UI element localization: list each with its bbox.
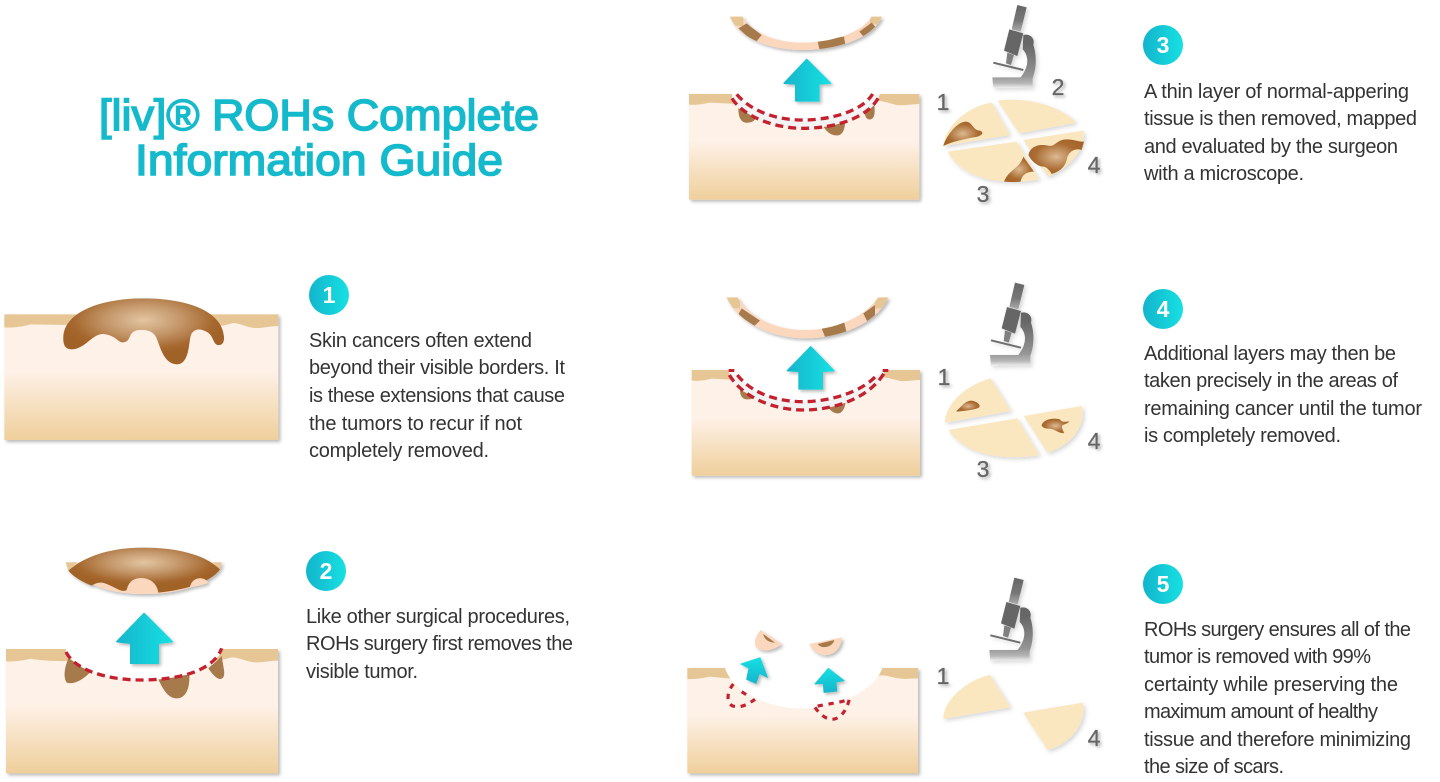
step 3 pie labels xyxy=(937,74,1101,207)
up arrow xyxy=(784,59,831,101)
excised bowl xyxy=(725,665,882,708)
step 5 text: maximum amount of healthy xyxy=(1144,701,1378,723)
step 1 text: beyond their visible borders. It xyxy=(309,357,565,379)
skin surface band xyxy=(692,370,920,381)
panel: step 3 illustration xyxy=(689,5,1084,200)
microscope xyxy=(989,578,1033,661)
skin block xyxy=(689,94,919,200)
step 3 text xyxy=(1143,81,1417,185)
step 4 pie labels: 1 xyxy=(938,364,950,390)
arrow: right pocket xyxy=(815,668,844,692)
step 3 text: with a microscope. xyxy=(1143,163,1304,185)
title xyxy=(99,91,539,185)
skin block xyxy=(4,314,278,440)
step 2 text xyxy=(306,606,573,683)
step 1 text xyxy=(309,330,565,462)
step 3 badge: 3 xyxy=(1157,32,1169,58)
step 1 text: Skin cancers often extend xyxy=(309,330,532,352)
panel: step 5 illustration xyxy=(687,578,1084,773)
removed tissue layer xyxy=(723,293,892,339)
step 5 badge xyxy=(1143,564,1183,604)
step 3 pie labels: 1 xyxy=(937,89,949,115)
step 1 badge xyxy=(309,275,349,315)
up arrow xyxy=(117,613,172,663)
step 2 badge xyxy=(306,551,346,591)
step 2 text: visible tumor. xyxy=(306,661,418,683)
step 4 text: remaining cancer until the tumor xyxy=(1144,398,1422,420)
step 5 pie labels: 1 xyxy=(937,663,949,689)
step 3 text: A thin layer of normal-appering xyxy=(1144,81,1409,103)
step 3 pie labels: 2 xyxy=(1052,74,1064,100)
step 2 text: Like other surgical procedures, xyxy=(306,606,570,628)
excised bowl xyxy=(66,647,222,680)
panel: step 1 illustration xyxy=(4,298,278,440)
step 5 text: tumor is removed with 99% xyxy=(1144,646,1371,668)
removed pocket: right xyxy=(809,637,842,655)
step 3 pie labels: 4 xyxy=(1088,152,1101,178)
pie sections xyxy=(943,100,1084,182)
step 5 text: tissue and therefore minimizing xyxy=(1144,729,1411,751)
title: Information Guide xyxy=(135,136,503,185)
skin block xyxy=(692,370,920,476)
step 4 text: is completely removed. xyxy=(1144,425,1341,447)
microscope xyxy=(990,283,1033,366)
step 5 pie labels xyxy=(937,663,1101,751)
step 5 badge: 5 xyxy=(1157,571,1170,597)
skin surface band xyxy=(687,668,918,679)
step 4 pie labels: 3 xyxy=(977,456,989,482)
excised bowl xyxy=(729,367,884,410)
panel: step 2 illustration xyxy=(6,548,278,773)
microscope xyxy=(992,5,1036,88)
step 5 text xyxy=(1144,619,1411,778)
step 1 text: the tumors to recur if not xyxy=(309,413,522,435)
skin surface band xyxy=(4,314,278,328)
step 3 text: tissue is then removed, mapped xyxy=(1144,108,1417,130)
excision lines xyxy=(737,374,877,402)
tumor xyxy=(63,298,224,364)
up arrow xyxy=(787,347,834,389)
step 1 badge: 1 xyxy=(323,282,336,308)
excision line xyxy=(66,648,222,680)
step 4 badge: 4 xyxy=(1157,296,1170,322)
step 2 badge: 2 xyxy=(320,558,332,584)
step 5 pie labels: 4 xyxy=(1088,725,1101,751)
step 1 text: completely removed. xyxy=(309,440,489,462)
removed tumor piece xyxy=(66,548,222,594)
pie sections xyxy=(945,378,1083,457)
residual tumor roots xyxy=(65,656,224,698)
removed tissue layer xyxy=(727,13,883,52)
step 4 text: Additional layers may then be xyxy=(1144,343,1396,365)
residual tumor roots xyxy=(740,390,846,413)
skin surface band xyxy=(689,94,919,105)
step 4 pie labels: 4 xyxy=(1088,428,1101,454)
excised bowl xyxy=(732,90,880,128)
step 5 text: ROHs surgery ensures all of the xyxy=(1144,619,1411,641)
residual tumor roots xyxy=(738,105,875,135)
skin block xyxy=(687,668,918,773)
step 4 text: taken precisely in the areas of xyxy=(1144,370,1398,392)
step 4 pie labels xyxy=(938,364,1101,482)
step 3 pie labels: 3 xyxy=(977,181,989,207)
step 5 text: certainty while preserving the xyxy=(1144,674,1398,696)
step 3 text: and evaluated by the surgeon xyxy=(1144,136,1398,158)
arrow: left pocket xyxy=(741,658,767,683)
panel: step 4 illustration xyxy=(692,283,1083,476)
skin block xyxy=(6,649,278,773)
excision lines xyxy=(728,684,755,707)
step 5 text: the size of scars. xyxy=(1144,756,1284,778)
title: [liv]® ROHs Complete xyxy=(99,91,539,140)
excision lines xyxy=(737,94,873,120)
pie sections xyxy=(943,675,1084,750)
step 3 badge xyxy=(1143,25,1183,65)
step 1 text: is these extensions that cause xyxy=(309,385,565,407)
step 4 badge xyxy=(1143,289,1183,329)
skin surface band xyxy=(6,649,278,662)
step 2 text: ROHs surgery first removes the xyxy=(306,633,573,655)
removed pocket: left xyxy=(755,630,782,650)
step 4 text xyxy=(1144,343,1422,447)
